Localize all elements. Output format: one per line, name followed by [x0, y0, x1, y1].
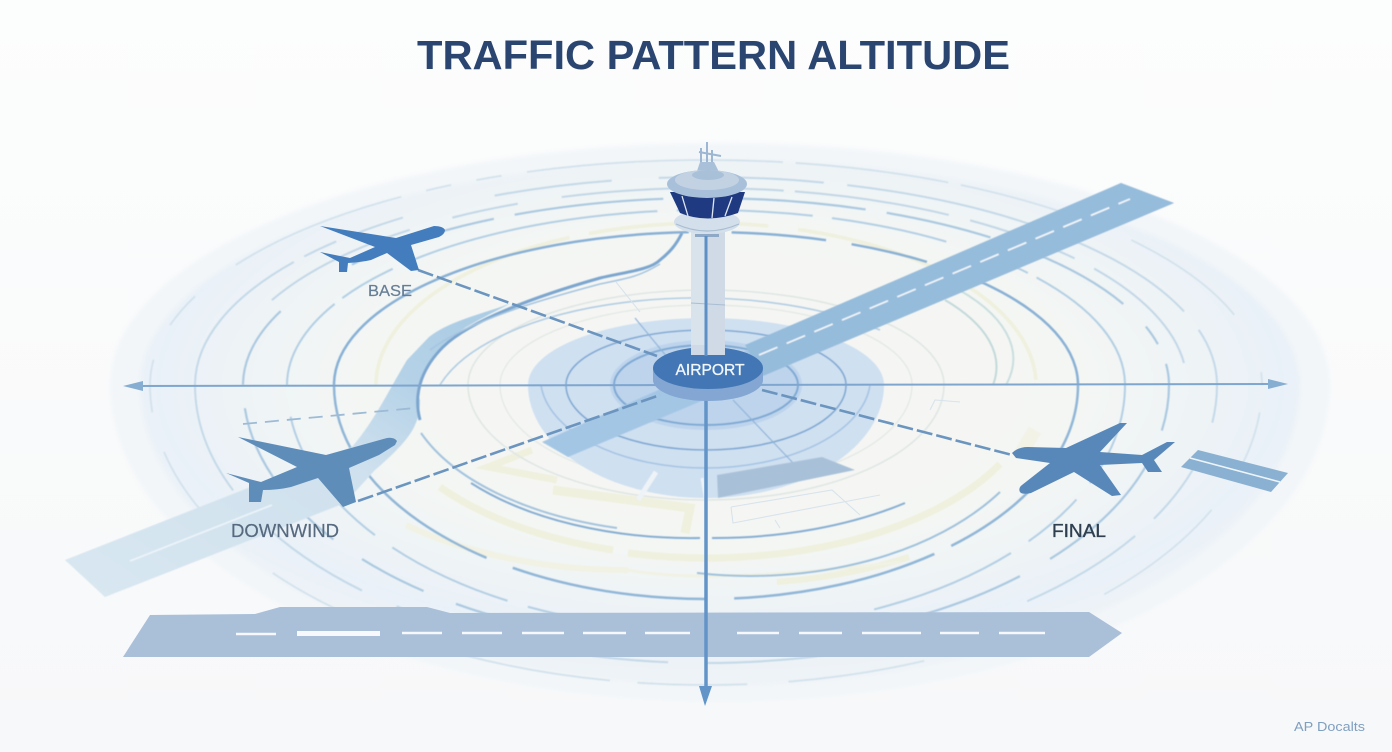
dashed flight paths — [243, 270, 1012, 501]
radar halo — [110, 143, 1330, 702]
ring radius 463 — [243, 198, 1169, 645]
main runway diagonal — [542, 183, 1174, 457]
label: base: BASE — [368, 283, 412, 300]
tower centre line — [704, 236, 708, 356]
faint inner rings — [468, 290, 944, 500]
cab windows — [670, 192, 745, 218]
watermark: AP Docalts — [1294, 719, 1366, 734]
small runway right — [1181, 450, 1288, 492]
vertical axis arrow — [699, 395, 712, 706]
grey-blue apron — [717, 457, 855, 498]
plane: final — [1012, 423, 1175, 496]
plane: downwind — [226, 437, 397, 507]
tower shaft — [691, 232, 725, 356]
bottom runway — [123, 607, 1122, 657]
faint ground grid lines — [616, 282, 960, 528]
left curved taxiway — [65, 233, 682, 597]
airport base disc — [653, 345, 763, 401]
cab roof — [667, 170, 747, 198]
horizontal axis arrow — [123, 379, 1288, 391]
label: airport: AIRPORT — [676, 362, 745, 379]
ring radius 286 — [421, 298, 1000, 576]
plane: base — [320, 226, 445, 272]
gallery under the cab — [674, 210, 740, 234]
ring radius 556 — [150, 160, 1262, 685]
control tower — [667, 142, 747, 356]
ring radius 511 — [195, 177, 1217, 663]
green right arcs — [945, 300, 996, 385]
range rings — [150, 160, 1262, 685]
antenna mast — [699, 142, 721, 172]
disc rings — [541, 330, 870, 468]
title: TRAFFIC PATTERN ALTITUDE — [417, 32, 1010, 78]
pale yellow taxiway markings — [376, 223, 1036, 582]
airport surface disc — [528, 318, 884, 502]
ring radius 481 — [225, 188, 1187, 385]
label: final: FINAL — [1052, 521, 1106, 541]
runway centre markings — [236, 633, 1045, 634]
ring radius 419 — [287, 210, 1125, 630]
disc segment gaps — [638, 472, 706, 502]
label: downwind: DOWNWIND — [231, 521, 339, 541]
disc spokes — [635, 318, 795, 465]
ring radius 372 — [334, 232, 1078, 599]
